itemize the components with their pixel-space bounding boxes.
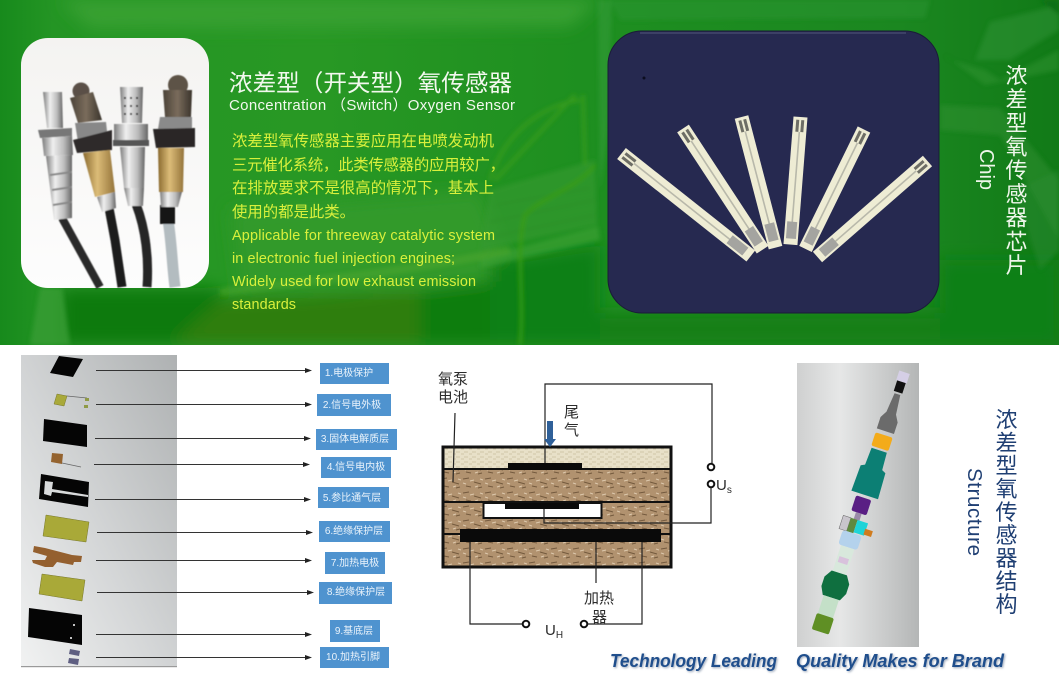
diagram labels: U	[716, 477, 727, 494]
panel: exploded layer stack	[21, 355, 177, 667]
light strip below the photo	[30, 288, 70, 345]
description text: 在排放要求不是很高的情况下，基本上	[232, 179, 494, 197]
label 5: 5.参比通气层	[323, 491, 381, 504]
diagram labels: 器	[592, 609, 607, 626]
diagram labels: 加热	[584, 590, 614, 607]
heater	[460, 529, 661, 542]
panel: exploded sensor structure	[797, 363, 923, 647]
dark green hex body	[819, 569, 852, 602]
photo: four oxygen sensors	[21, 38, 209, 288]
bracket assembly	[839, 509, 877, 539]
diagram labels	[438, 371, 732, 641]
label 2	[317, 394, 391, 416]
slogans	[610, 651, 1006, 672]
label 1: 1.电极保护	[325, 366, 373, 379]
description text: in electronic fuel injection engines;	[232, 251, 455, 267]
chip strip 2	[677, 125, 768, 254]
label 6	[319, 521, 390, 542]
diagram labels: U	[545, 622, 556, 639]
sensor cross-section diagram	[438, 371, 732, 641]
outer electrode	[508, 463, 582, 470]
layer 9	[28, 608, 82, 645]
wiring	[453, 384, 714, 627]
layer 1	[50, 356, 83, 377]
description text: standards	[232, 297, 296, 313]
slogans: Technology Leading	[611, 652, 778, 672]
heading: 浓差型（开关型）氧传感器	[229, 70, 512, 96]
diagram labels: 电池	[438, 389, 468, 406]
label 10: 10.加热引脚	[326, 650, 380, 663]
inner electrode	[505, 503, 579, 509]
chip vertical title: 浓差型氧传感器芯片	[1002, 64, 1028, 277]
layer 2	[54, 394, 89, 408]
description text	[232, 131, 505, 313]
chip vertical title	[975, 64, 1028, 277]
slogans: Technology Leading	[610, 651, 777, 671]
sensor 2	[70, 82, 122, 287]
label 8: 8.绝缘保护层	[327, 585, 385, 598]
sensor 3	[113, 87, 149, 287]
layer 4	[51, 453, 81, 467]
chip strip 4	[783, 116, 807, 245]
pale lower tube	[818, 595, 839, 619]
label 7	[325, 552, 385, 574]
pale tube	[833, 545, 854, 575]
keyboard and cables	[488, 160, 598, 246]
green banner background	[0, 0, 1059, 345]
layer 6	[43, 515, 89, 542]
chip strip 3	[735, 115, 782, 249]
layer 8	[39, 574, 85, 601]
label 7: 7.加热电极	[331, 556, 379, 569]
label 5	[318, 487, 389, 508]
description text: 浓差型氧传感器主要应用在电喷发动机	[232, 131, 495, 150]
grey cable boot	[877, 391, 906, 434]
diagram labels: H	[556, 630, 563, 641]
label 3	[316, 429, 397, 450]
label 9: 9.基底层	[335, 624, 373, 637]
layer 3	[43, 419, 87, 447]
structure vertical title: 浓差型氧传感器结构	[992, 408, 1018, 616]
description text: Applicable for threeway catalytic system	[232, 228, 495, 244]
orange ring	[871, 432, 893, 451]
label 8	[319, 582, 392, 604]
sensor 4	[153, 75, 195, 287]
diagram labels: 氧泵	[438, 371, 468, 388]
diagram labels: 气	[564, 422, 579, 439]
light blue collar	[838, 530, 862, 550]
exhaust arrow	[544, 421, 556, 447]
chip vertical title: Chip	[975, 149, 997, 190]
label 1	[320, 363, 389, 384]
description text: 三元催化系统，此类传感器的应用较广，	[232, 155, 505, 174]
heading: Concentration （Switch）Oxygen Sensor	[229, 97, 515, 114]
label 4: 4.信号电内极	[327, 460, 385, 473]
olive end cap	[812, 613, 834, 635]
label 2: 2.信号电外极	[323, 398, 381, 411]
heading	[229, 70, 515, 114]
description text: 使用的都是此类。	[232, 203, 355, 221]
description text: Widely used for low exhaust emission	[232, 274, 476, 290]
structure vertical title	[963, 408, 1018, 616]
label 9	[330, 620, 380, 642]
chip strip 6	[813, 156, 932, 262]
layer 5	[39, 474, 89, 507]
air cavity	[484, 503, 602, 518]
machinery on the right	[975, 5, 1059, 60]
sensor 1	[38, 92, 100, 287]
label 4	[321, 457, 391, 478]
purple seal	[851, 495, 871, 515]
layer 7	[32, 546, 82, 567]
chip strip 1	[617, 148, 755, 261]
black sleeve	[894, 380, 906, 394]
top cap	[896, 371, 910, 383]
lower text band	[220, 250, 510, 292]
layer arrows	[94, 368, 314, 660]
structure vertical title: Structure	[963, 468, 986, 556]
layer 10	[68, 649, 80, 665]
photo: sensor chips on dark panel	[608, 31, 939, 313]
chip strip 5	[799, 126, 870, 252]
slogans: Quality Makes for Brand	[796, 651, 1005, 671]
diagram labels: s	[727, 485, 732, 496]
slogans: Quality Makes for Brand	[797, 652, 1006, 672]
label 3: 3.固体电解质层	[321, 432, 389, 445]
teal housing	[851, 446, 893, 499]
label 10	[320, 647, 389, 668]
layer labels	[316, 363, 397, 668]
label 6: 6.绝缘保护层	[325, 524, 383, 537]
diagram labels: 尾	[564, 404, 579, 421]
